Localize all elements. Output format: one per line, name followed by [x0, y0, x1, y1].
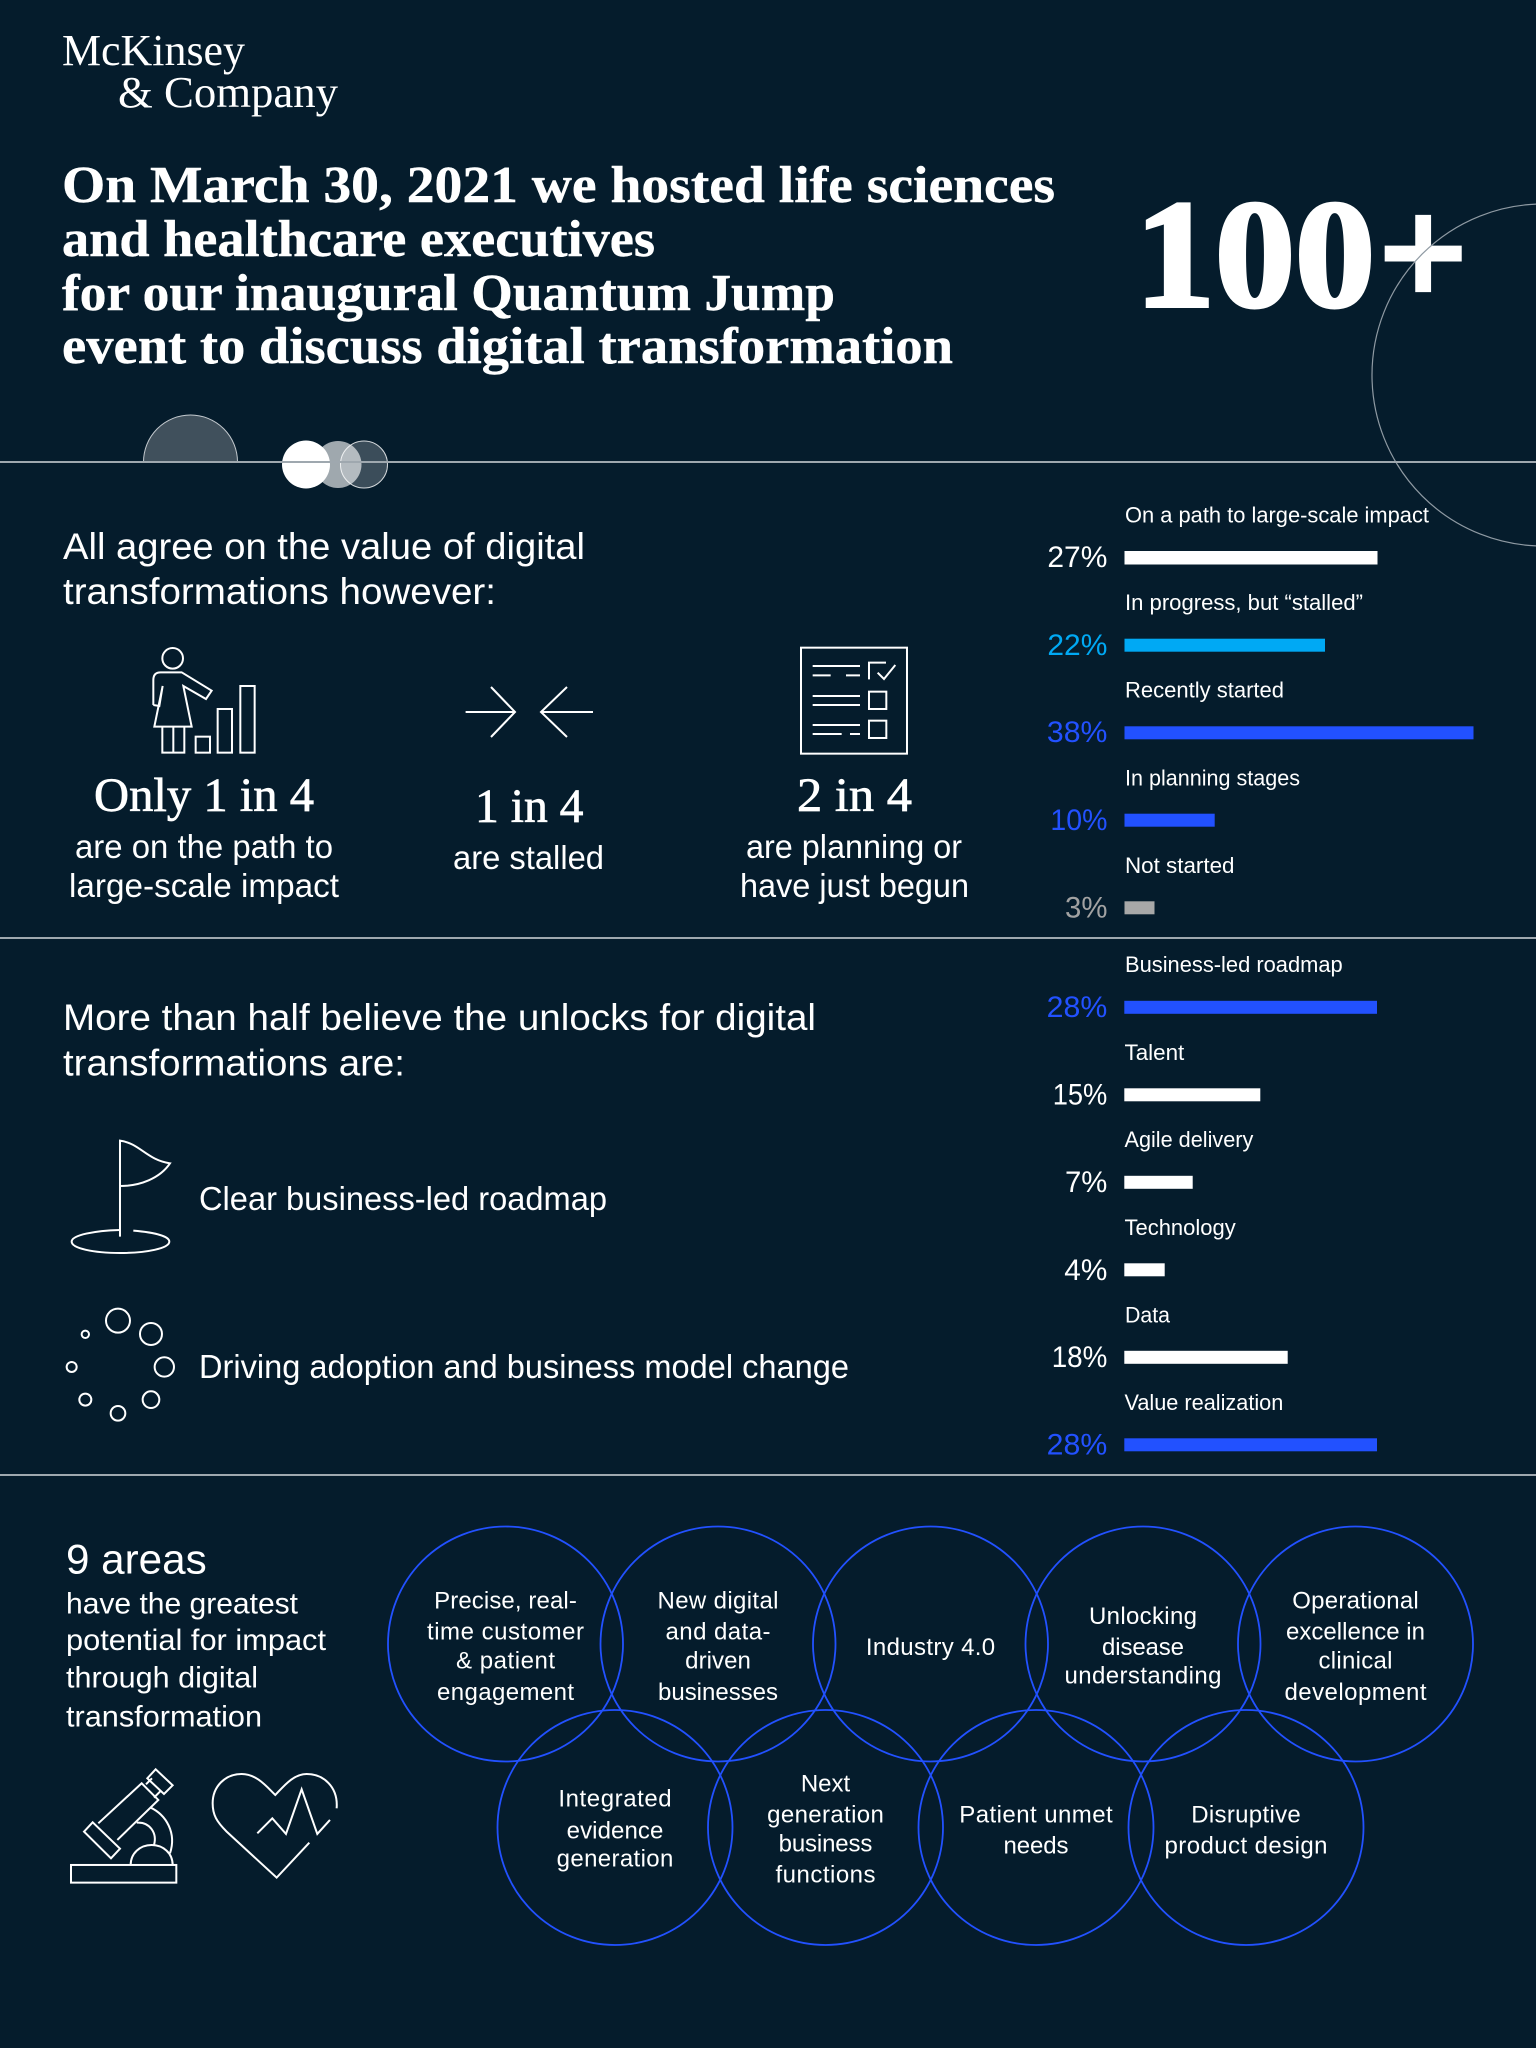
bar: on a path to large-scale impact: 27% [1047, 541, 1107, 574]
bar: talent: Talent [1124, 1040, 1184, 1065]
bar: recently started: Recently started [1125, 678, 1284, 703]
bar: agile delivery: Agile delivery [1124, 1127, 1253, 1152]
bar: in progress but stalled: 22% [1047, 629, 1107, 662]
icon: heart with pulse [213, 1774, 337, 1878]
area: industry 4.0 [813, 1526, 1048, 1762]
bar: not started: Not started [1125, 853, 1234, 878]
bar: value realization: 28% [1047, 1428, 1107, 1462]
icon: three overlapping circles [282, 440, 388, 488]
bar: recently started [1047, 678, 1474, 749]
headline number: 100+ [1135, 167, 1467, 340]
text: driving adoption: Driving adoption and business model change [199, 1348, 849, 1385]
text: greatest potential description: transformation [66, 1701, 262, 1734]
bar: recently started: 38% [1047, 716, 1107, 749]
area: new digital and data-driven businesses: driven [685, 1647, 751, 1674]
logo: McKinsey & Company [62, 26, 338, 117]
stat: only 1 in 4: Only 1 in 4 [94, 769, 314, 822]
area: new digital and data-driven businesses: New digital [658, 1587, 778, 1614]
decorative large circle outline [1372, 204, 1536, 546]
stat: 2 in 4: 2 in 4 [797, 769, 912, 822]
bar: business-led roadmap: 28% [1047, 991, 1107, 1024]
area: next generation business functions: functions [776, 1861, 876, 1888]
area: precise real-time customer and patient engagement [388, 1526, 623, 1762]
text: greatest potential description: through digital [66, 1662, 258, 1695]
text: greatest potential description: potential for impact [66, 1624, 327, 1657]
area: patient unmet needs: needs [1004, 1832, 1068, 1859]
area: integrated evidence generation [498, 1710, 732, 1945]
area: industry 4.0: Industry 4.0 [866, 1634, 995, 1661]
area: operational excellence in clinical development: excellence in [1286, 1618, 1425, 1645]
area: next generation business functions [708, 1710, 943, 1945]
logo: McKinsey & Company: & Company [118, 68, 338, 117]
text: 9 areas: 9 areas [66, 1535, 207, 1582]
title [62, 157, 1055, 375]
bar: agile delivery [1065, 1127, 1253, 1199]
heading: more than half: transformations are: [63, 1043, 405, 1084]
venn diagram: nine focus areas [388, 1526, 1473, 1945]
area: disruptive product design [1128, 1710, 1364, 1945]
stat: 2 in 4: have just begun [740, 867, 969, 904]
bar: in planning stages: In planning stages [1125, 766, 1300, 791]
area: disruptive product design: product design [1164, 1832, 1328, 1859]
text: greatest potential description: have the greatest [66, 1587, 299, 1620]
stat: 1 in 4 stalled [453, 780, 604, 876]
title: and healthcare executives [62, 211, 655, 268]
icon: microscope [71, 1769, 176, 1883]
stat: only 1 in 4 [69, 769, 339, 904]
headline number: 100+: 100 [1135, 170, 1375, 340]
headline number: 100+: + [1379, 167, 1467, 339]
bar: in progress but stalled [1047, 590, 1363, 662]
heading: more than half: More than half believe the unlocks for digital [63, 997, 816, 1038]
icon: semicircle on the divider [144, 415, 238, 462]
icon: checklist [801, 648, 907, 754]
area: unlocking disease understanding [1026, 1526, 1260, 1762]
area: operational excellence in clinical development [1238, 1526, 1473, 1762]
area: patient unmet needs: Patient unmet [959, 1802, 1113, 1829]
area: integrated evidence generation: Integrated [558, 1786, 672, 1813]
stat: 2 in 4 [740, 769, 969, 904]
stat: only 1 in 4: are on the path to [75, 828, 333, 865]
stat: only 1 in 4: large-scale impact [69, 867, 339, 904]
area: integrated evidence generation: generation [557, 1846, 673, 1873]
title: event to discuss digital transformation [62, 318, 953, 375]
area: integrated evidence generation: evidence [567, 1817, 663, 1844]
area: next generation business functions: Next [801, 1771, 850, 1798]
bar: technology: 4% [1064, 1254, 1107, 1287]
area: precise real-time customer and patient engagement: engagement [437, 1679, 574, 1706]
area: new digital and data-driven businesses: businesses [658, 1679, 778, 1706]
area: patient unmet needs [918, 1710, 1154, 1945]
area: operational excellence in clinical development: clinical [1318, 1647, 1392, 1674]
title: for our inaugural Quantum Jump [62, 265, 835, 322]
area: operational excellence in clinical development: development [1284, 1679, 1427, 1706]
panel: 9 areas intro [66, 1535, 337, 1883]
bar chart: transformation stage [1047, 503, 1474, 925]
text: greatest potential description [66, 1587, 327, 1734]
area: next generation business functions: generation [767, 1802, 884, 1829]
icon: ring of circles [67, 1309, 174, 1421]
text: clear business-led roadmap: Clear business-led roadmap [199, 1180, 607, 1217]
bar: talent: 15% [1053, 1079, 1107, 1112]
bar: technology: Technology [1124, 1215, 1236, 1240]
stat: 1 in 4 stalled: are stalled [453, 839, 604, 876]
bar: on a path to large-scale impact [1047, 503, 1429, 574]
bar: technology [1064, 1215, 1236, 1287]
bar: talent [1053, 1040, 1260, 1112]
bar: in progress but stalled: In progress, but “stalled” [1125, 590, 1363, 615]
panel: digital transformation status [63, 526, 969, 904]
area: next generation business functions: business [779, 1831, 872, 1858]
panel: unlocks for digital transformation [63, 997, 849, 1421]
bar: value realization [1047, 1390, 1377, 1462]
bar: not started [1065, 853, 1234, 925]
area: unlocking disease understanding: understanding [1064, 1662, 1222, 1689]
bar: business-led roadmap: Business-led roadmap [1125, 952, 1343, 977]
bar: data: 18% [1052, 1341, 1107, 1374]
icon: person with rising bars [153, 648, 255, 753]
heading: all agree: transformations however: [63, 571, 496, 612]
area: precise real-time customer and patient engagement: Precise, real- [434, 1587, 577, 1614]
area: operational excellence in clinical development: Operational [1292, 1587, 1419, 1614]
bar: in planning stages: 10% [1050, 804, 1107, 837]
area: new digital and data-driven businesses [600, 1526, 836, 1762]
heading: all agree: All agree on the value of digital [63, 526, 585, 567]
bar: in planning stages [1050, 766, 1300, 837]
area: unlocking disease understanding: disease [1102, 1634, 1184, 1661]
bar: value realization: Value realization [1124, 1390, 1283, 1415]
bar chart: unlocks [1047, 952, 1377, 1462]
heading: more than half [63, 997, 816, 1084]
logo: McKinsey & Company: McKinsey [62, 26, 245, 75]
bar: agile delivery: 7% [1065, 1166, 1107, 1199]
icon: arrows pointing inward [466, 687, 593, 737]
bar: not started: 3% [1065, 892, 1107, 925]
stat: 1 in 4 stalled: 1 in 4 [475, 780, 584, 833]
title: On March 30, 2021 we hosted life sciences [62, 157, 1055, 214]
bar: on a path to large-scale impact: On a path to large-scale impact [1125, 503, 1429, 528]
bar: data [1052, 1302, 1288, 1374]
heading: all agree [63, 526, 585, 612]
bar: business-led roadmap [1047, 952, 1377, 1024]
bar: data: Data [1125, 1302, 1171, 1327]
area: precise real-time customer and patient engagement: & patient [456, 1647, 555, 1674]
area: unlocking disease understanding: Unlocking [1089, 1603, 1197, 1630]
stat: 2 in 4: are planning or [746, 828, 962, 865]
area: new digital and data-driven businesses: and data- [666, 1618, 770, 1645]
area: precise real-time customer and patient engagement: time customer [427, 1618, 584, 1645]
icon: golf flag [72, 1141, 170, 1253]
area: disruptive product design: Disruptive [1191, 1802, 1301, 1829]
